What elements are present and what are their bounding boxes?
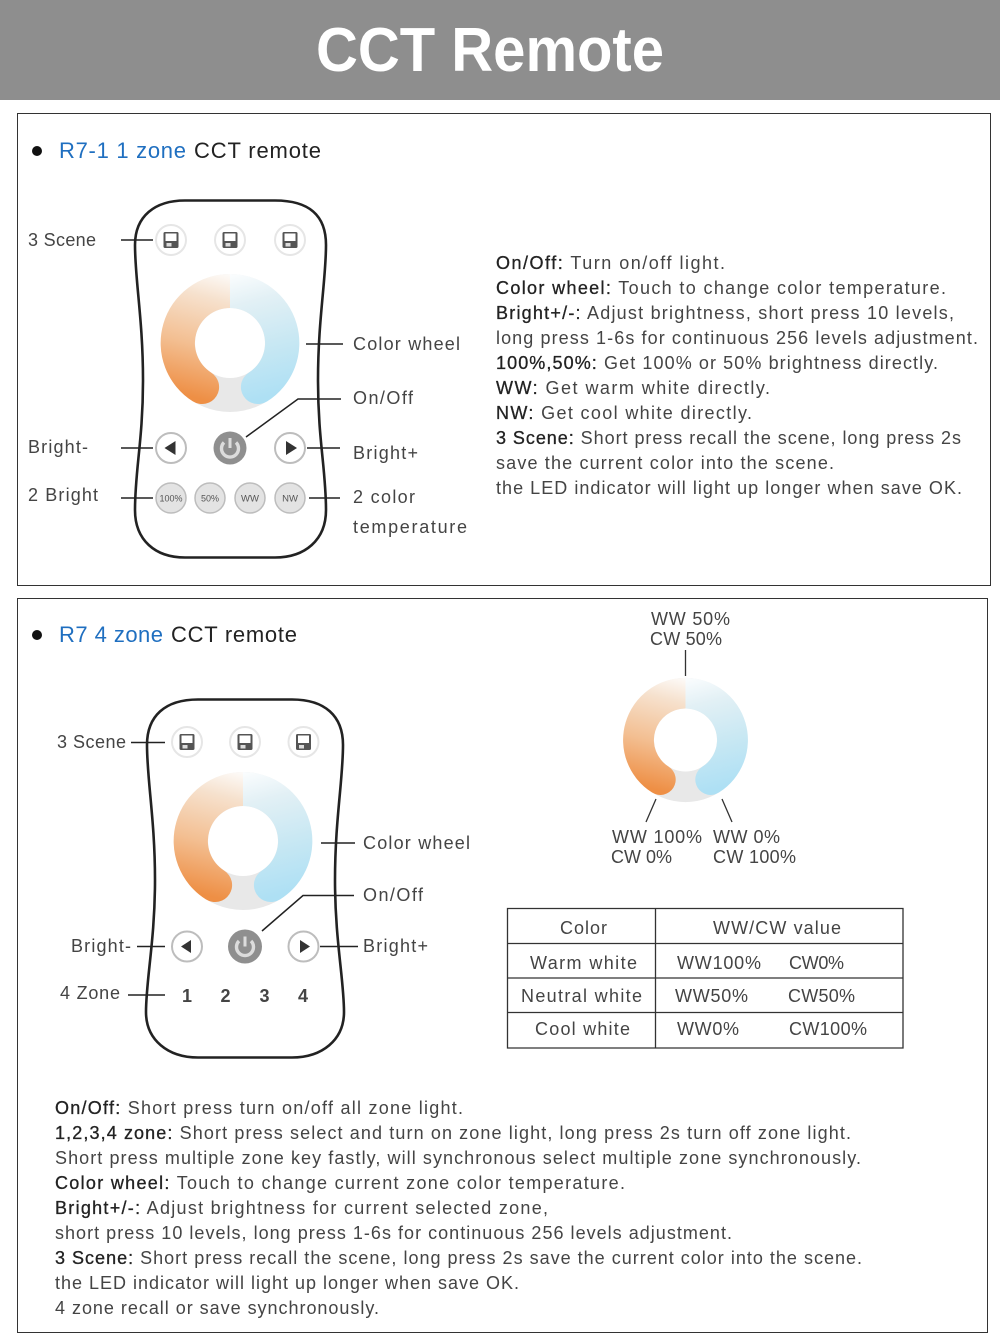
callouts: R7 4 zone labels and leader lines: 4 Zone — [60, 983, 120, 1003]
callouts: R7-1 labels and leader lines: 2 Bright — [28, 485, 98, 505]
text block: R7 4 zone function description: Short press multiple zone key fastly, will synchronous select multiple zone synchronously. — [55, 1148, 861, 1168]
table: WW/CW values: Neutral white — [521, 986, 642, 1006]
callouts: R7-1 labels and leader lines: 2 color — [353, 487, 415, 507]
heading: R7 4 zone: R7 4 zone — [59, 622, 163, 647]
zone keys: 3 — [259, 986, 270, 1006]
text block: R7-1 function description: NW: Get cool white directly. — [496, 403, 752, 423]
table: WW/CW values: Color — [560, 918, 607, 938]
text block: R7-1 function description: the LED indicator will light up longer when save OK. — [496, 478, 962, 498]
text block: R7-1 function description: Bright+/-: Adjust brightness, short press 10 levels, — [496, 303, 954, 323]
text block: R7 4 zone function description — [55, 1098, 862, 1318]
remote: R7 4 zone — [146, 700, 344, 1058]
table: WW/CW values: CW100% — [789, 1019, 867, 1039]
text block: R7 4 zone function description: Bright+/-: Adjust brightness for current selected zone, — [55, 1198, 548, 1218]
color wheel diagram: WW/CW values — [611, 609, 796, 867]
color wheel diagram: WW/CW values: WW 50% — [651, 609, 730, 629]
zone keys: 4 — [298, 986, 308, 1006]
text block: R7-1 function description — [496, 253, 978, 498]
color wheel diagram: WW/CW values: CW 100% — [713, 847, 796, 867]
color wheel — [174, 772, 312, 910]
table: WW/CW values: WW100% — [677, 953, 761, 973]
text block: R7 4 zone function description: Color wheel: Touch to change current zone color temperature. — [55, 1173, 625, 1193]
color wheel — [623, 678, 748, 802]
zone keys: 2 — [220, 986, 231, 1006]
text block: R7 4 zone function description: 1,2,3,4 zone: Short press select and turn on zone light, long press 2s turn off zone light. — [55, 1123, 851, 1143]
table: WW/CW values: WW/CW value — [713, 918, 841, 938]
table: WW/CW values: Warm white — [530, 953, 637, 973]
callouts: R7 4 zone labels and leader lines: Color wheel — [363, 833, 470, 853]
icon: power button — [214, 432, 246, 464]
icon: bright+ button — [288, 932, 318, 962]
heading: R7-1: R7-1 1 zone — [59, 138, 186, 163]
callouts: R7 4 zone labels and leader lines: Bright- — [71, 936, 131, 956]
icon: bright- button — [172, 932, 202, 962]
remote: R7-1 — [135, 200, 326, 558]
text block: R7 4 zone function description: the LED indicator will light up longer when save OK. — [55, 1273, 519, 1293]
text block: R7 4 zone function description: short press 10 levels, long press 1-6s for continuous 256 levels adjustment. — [55, 1223, 732, 1243]
callouts: R7 4 zone labels and leader lines: Bright+ — [363, 936, 428, 956]
table: WW/CW values — [508, 908, 903, 1048]
brightness and colour buttons: WW — [241, 494, 259, 504]
callouts: R7-1 labels and leader lines: Bright+ — [353, 443, 418, 463]
text block: R7-1 function description: long press 1-6s for continuous 256 levels adjustment. — [496, 328, 978, 348]
callouts: R7 4 zone labels and leader lines — [57, 732, 470, 1003]
icon: bright+ button — [275, 433, 305, 463]
icon: scene buttons — [156, 225, 305, 255]
icon: power button — [228, 930, 262, 964]
text block: R7 4 zone function description: 4 zone recall or save synchronously. — [55, 1298, 379, 1318]
text block: R7-1 function description: 100%,50%: Get 100% or 50% brightness directly. — [496, 353, 938, 373]
table: WW/CW values: Cool white — [535, 1019, 630, 1039]
color wheel diagram: WW/CW values: CW 0% — [611, 847, 672, 867]
heading: R7-1 — [32, 138, 321, 163]
callouts: R7 4 zone labels and leader lines: On/Off — [363, 885, 424, 905]
brightness and colour buttons: 50% — [201, 494, 219, 504]
brightness and colour buttons: 100% — [159, 494, 183, 504]
callouts: R7-1 labels and leader lines: temperature — [353, 517, 467, 537]
color wheel diagram: WW/CW values: CW 50% — [650, 629, 722, 649]
color wheel diagram: WW/CW values: WW 100% — [612, 827, 702, 847]
icon: scene buttons — [172, 727, 318, 757]
table: WW/CW values: CW0% — [789, 953, 844, 973]
heading: R7-1: CCT remote — [194, 138, 321, 163]
panel: R7 4 zone CCT remote — [18, 598, 988, 1332]
text block: R7-1 function description: 3 Scene: Short press recall the scene, long press 2s — [496, 428, 961, 448]
callouts: R7-1 labels and leader lines: Bright- — [28, 437, 88, 457]
zone keys: 1 — [182, 986, 192, 1006]
text block: R7-1 function description: On/Off: Turn on/off light. — [496, 253, 725, 273]
color wheel — [161, 274, 299, 412]
header banner — [0, 0, 1000, 100]
heading: R7 4 zone — [32, 622, 297, 647]
callouts: R7-1 labels and leader lines: Color wheel — [353, 334, 460, 354]
text block: R7-1 function description: Color wheel: Touch to change color temperature. — [496, 278, 946, 298]
callouts: R7-1 labels and leader lines: 3 Scene — [28, 230, 96, 250]
brightness and colour buttons — [156, 483, 305, 513]
title: CCT Remote — [316, 16, 664, 85]
table: WW/CW values: WW0% — [677, 1019, 739, 1039]
text block: R7 4 zone function description: 3 Scene: Short press recall the scene, long press 2s save the current color into the scene. — [55, 1248, 862, 1268]
zone keys — [182, 986, 308, 1006]
table: WW/CW values: WW50% — [675, 986, 748, 1006]
color wheel diagram: WW/CW values: WW 0% — [713, 827, 780, 847]
text block: R7-1 function description: save the current color into the scene. — [496, 453, 834, 473]
callouts: R7 4 zone labels and leader lines: 3 Scene — [57, 732, 126, 752]
callouts: R7-1 labels and leader lines: On/Off — [353, 388, 414, 408]
panel: R7-1 1 zone CCT remote — [18, 114, 990, 586]
table: WW/CW values: CW50% — [788, 986, 855, 1006]
text block: R7 4 zone function description: On/Off: Short press turn on/off all zone light. — [55, 1098, 463, 1118]
heading: R7 4 zone: CCT remote — [171, 622, 297, 647]
text block: R7-1 function description: WW: Get warm white directly. — [496, 378, 770, 398]
callouts: R7-1 labels and leader lines — [28, 230, 467, 537]
brightness and colour buttons: NW — [282, 494, 298, 504]
icon: bright- button — [156, 433, 186, 463]
